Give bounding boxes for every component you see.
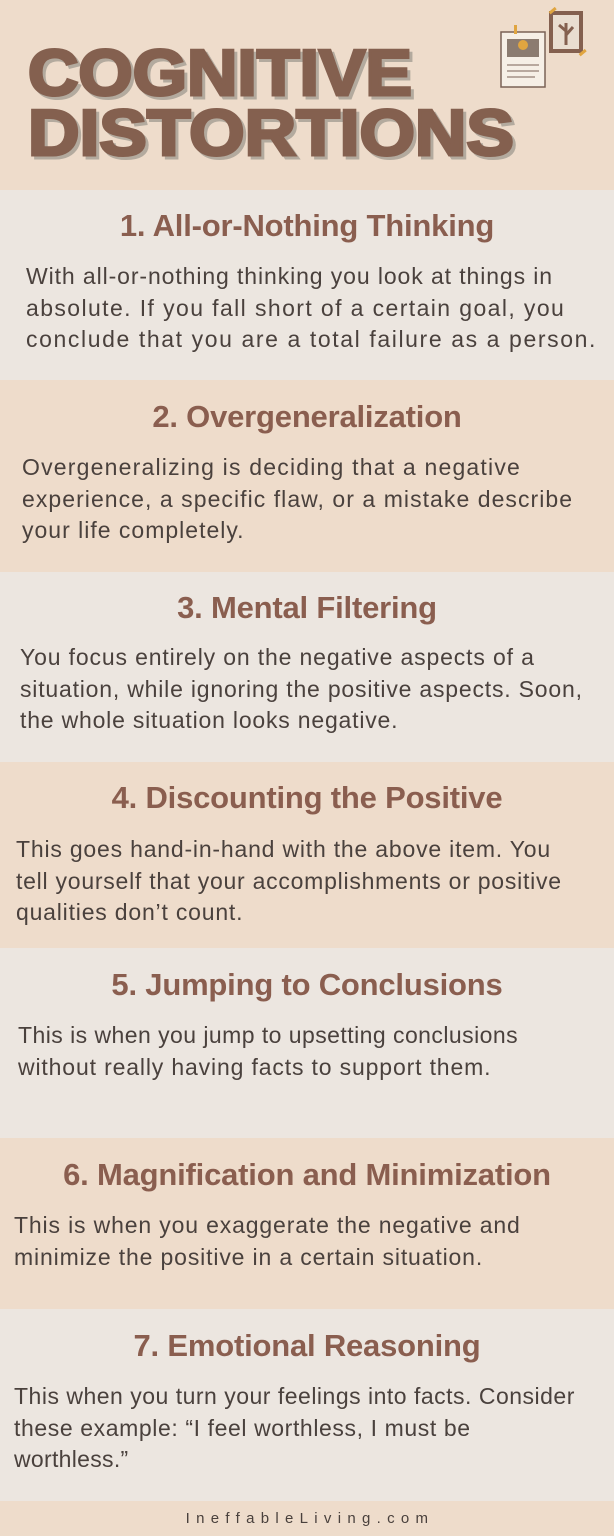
panel: 1 [0, 190, 614, 380]
text 2: Overgeneralizing is deciding that a negative [22, 454, 521, 480]
panel: 2 [0, 380, 614, 572]
footer [0, 1501, 614, 1536]
text 3: situation, while ignoring the positive aspects. Soon, [20, 676, 583, 702]
text 1 [26, 263, 597, 352]
text 4: qualities don’t count. [16, 899, 243, 925]
text 5 [18, 1022, 518, 1080]
text 1: absolute. If you fall short of a certain goal, you [26, 294, 565, 320]
panel: 7 [0, 1309, 614, 1501]
text 7: This when you turn your feelings into facts. Consider [14, 1383, 575, 1409]
panel: 5 [0, 948, 614, 1138]
title: DISTORTIONS [31, 99, 517, 172]
text 7: worthless.” [14, 1446, 128, 1472]
text 3: the whole situation looks negative. [20, 707, 398, 733]
text 6 [14, 1212, 521, 1270]
text 6: This is when you exaggerate the negative and [14, 1212, 521, 1238]
text 1: With all-or-nothing thinking you look at things in [26, 263, 553, 289]
title [28, 36, 517, 172]
panel: 4 [0, 762, 614, 948]
heading 6: 6. Magnification and Minimization [63, 1157, 551, 1192]
title: COGNITIVE [31, 39, 415, 112]
icon: pinned pictures [500, 6, 587, 88]
heading 4: 4. Discounting the Positive [112, 780, 502, 815]
text 7: these example: “I feel worthless, I must be [14, 1414, 471, 1440]
footer: IneffableLiving.com [186, 1510, 434, 1527]
text 3: You focus entirely on the negative aspects of a [20, 644, 535, 670]
title: COGNITIVE [28, 36, 412, 109]
panel: 6 [0, 1138, 614, 1309]
text 4: This goes hand-in-hand with the above item. You [16, 836, 551, 862]
text 4 [16, 836, 562, 925]
heading 5: 5. Jumping to Conclusions [111, 967, 503, 1002]
text 2: experience, a specific flaw, or a mistake describe [22, 486, 573, 512]
title: DISTORTIONS [28, 96, 514, 169]
text 5: This is when you jump to upsetting conclusions [18, 1022, 518, 1048]
text 5: without really having facts to support them. [18, 1054, 491, 1080]
heading 3: 3. Mental Filtering [177, 590, 437, 625]
text 7 [14, 1383, 575, 1472]
heading 7: 7. Emotional Reasoning [134, 1328, 480, 1363]
header panel [0, 0, 614, 190]
text 4: tell yourself that your accomplishments or positive [16, 868, 562, 894]
text 6: minimize the positive in a certain situation. [14, 1244, 483, 1270]
text 3 [20, 644, 583, 733]
heading 2: 2. Overgeneralization [152, 399, 462, 434]
heading 1: 1. All-or-Nothing Thinking [120, 208, 494, 243]
text 1: conclude that you are a total failure as a person. [26, 326, 597, 352]
text 2 [22, 454, 573, 543]
text 2: your life completely. [22, 517, 245, 543]
panel: 3 [0, 572, 614, 762]
